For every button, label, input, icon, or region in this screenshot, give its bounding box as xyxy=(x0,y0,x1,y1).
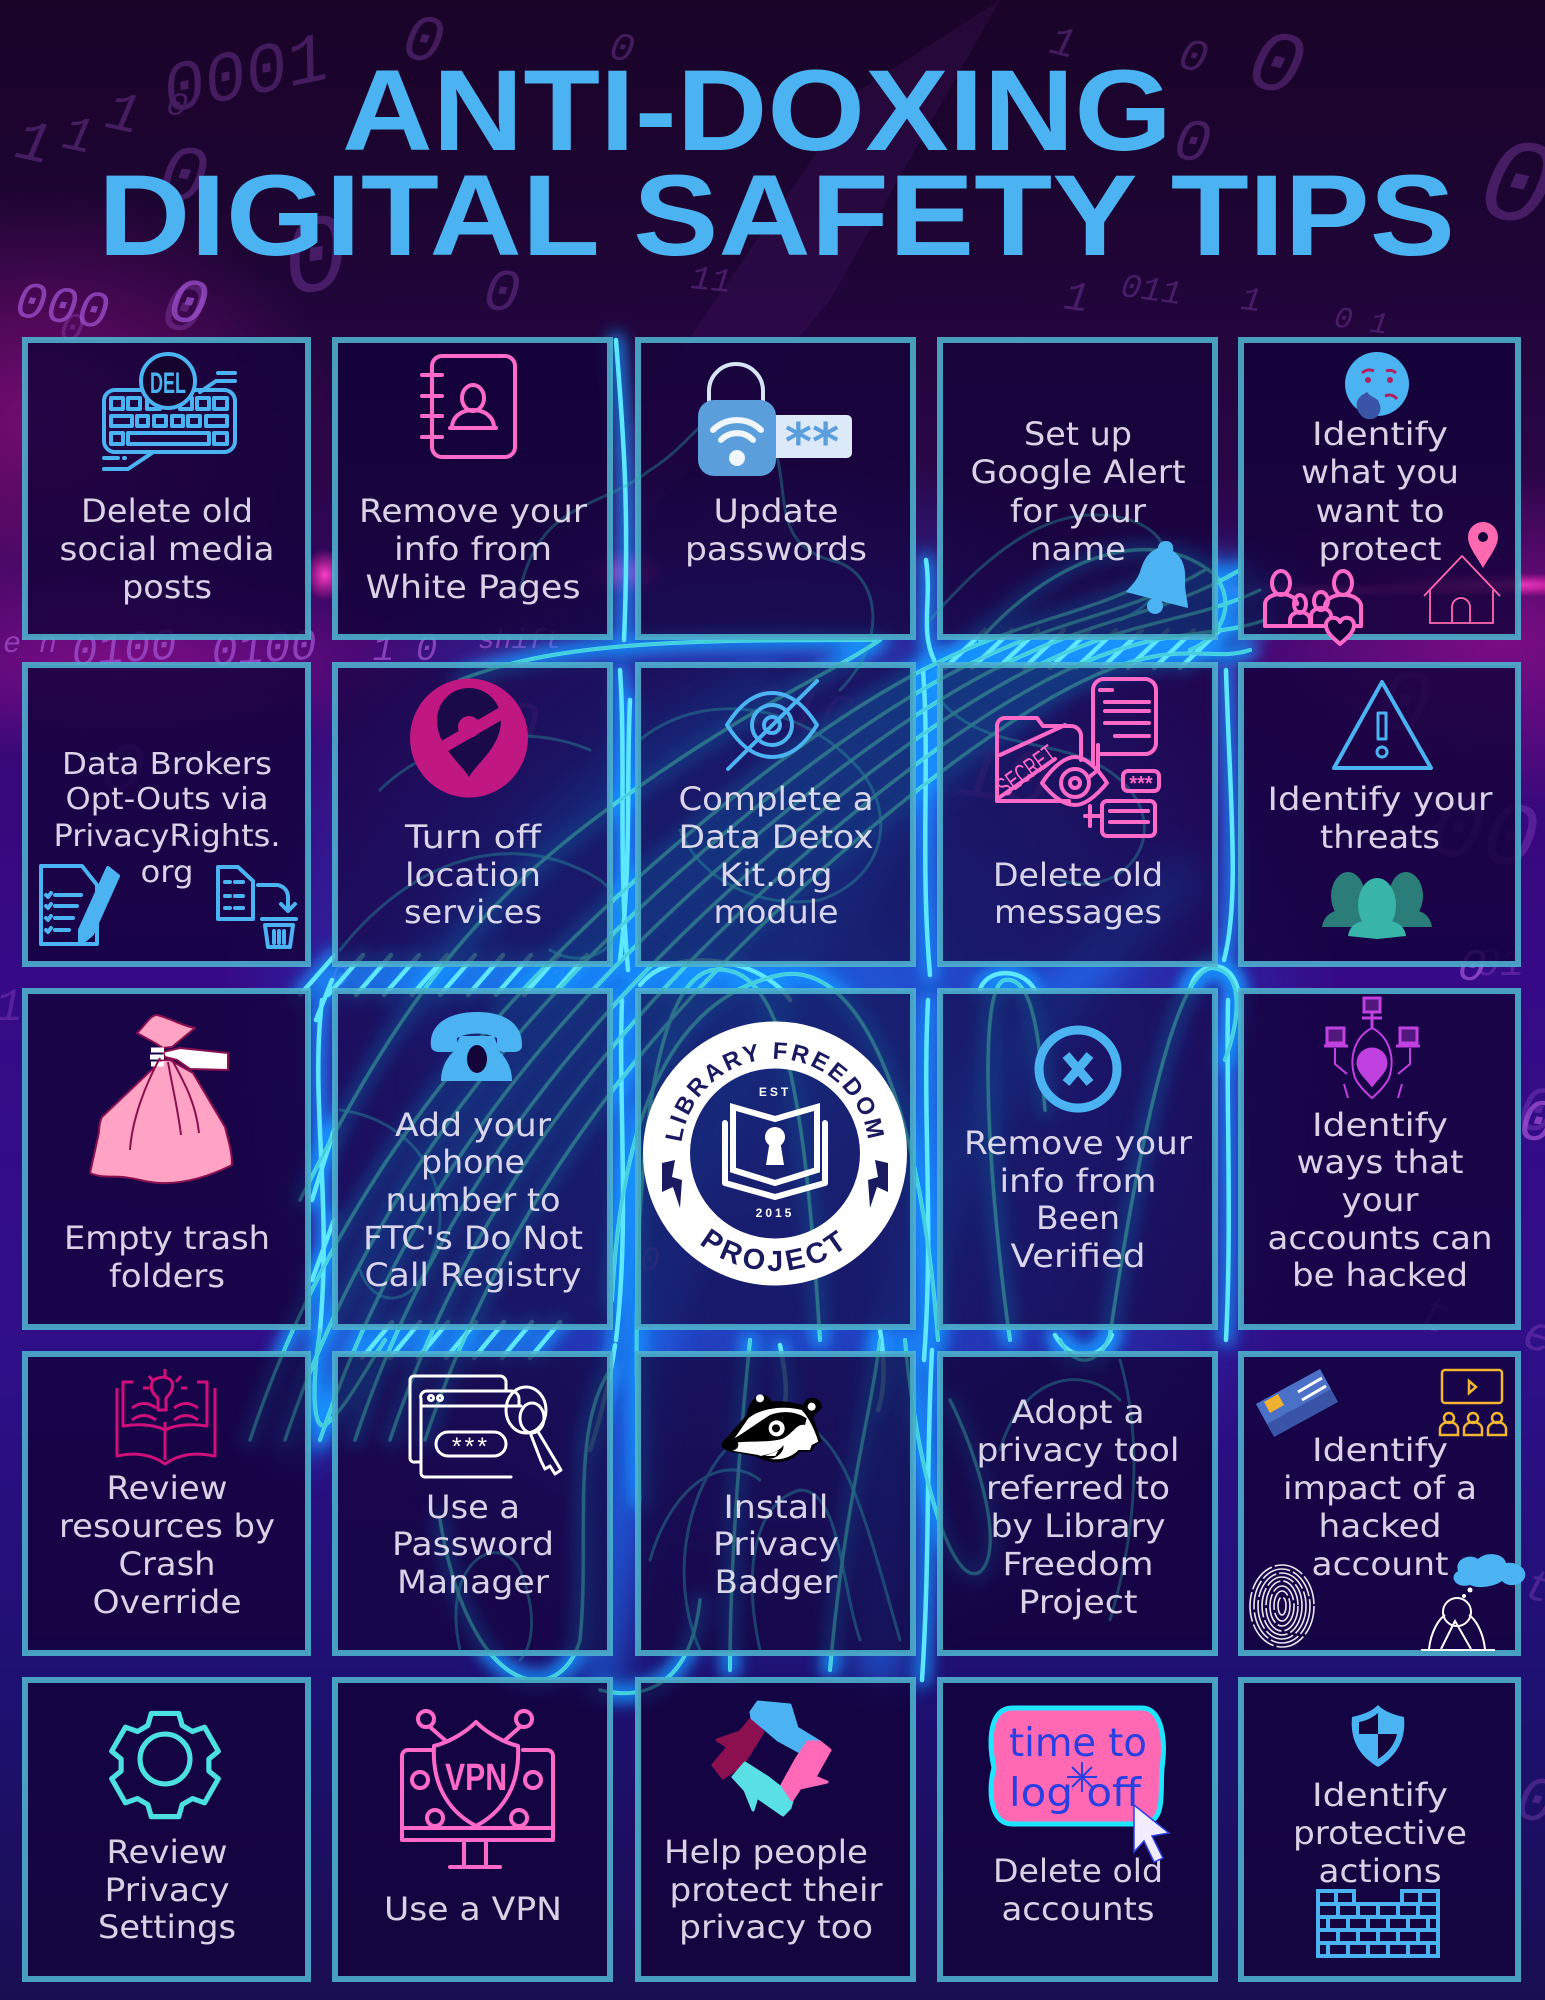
text: add your phone number: FTC's Do Not xyxy=(363,1219,583,1257)
text: delete old social media posts: Delete old xyxy=(81,492,253,530)
background code text in row gap: 1 xyxy=(550,963,570,1001)
icon: keyboard with DEL key: DEL xyxy=(150,367,186,400)
background binary digits: 0001 xyxy=(156,22,337,134)
neon fingerprint swirl lines xyxy=(250,550,1265,1693)
text: review privacy settings: Review xyxy=(106,1833,228,1871)
background binary digits: 011 xyxy=(1118,269,1184,315)
panel: password manager xyxy=(332,1351,613,1656)
logo: library freedom project badge: PROJECT xyxy=(700,1228,842,1272)
text: delete old accounts xyxy=(993,1852,1163,1928)
text: install privacy badger: Badger xyxy=(714,1563,838,1601)
panel: location services xyxy=(332,662,613,967)
text: adopt a privacy tool: Freedom xyxy=(1002,1545,1154,1583)
text: remove info from white pages: White Pages xyxy=(366,568,580,606)
text: remove info from white pages: info from xyxy=(394,530,552,568)
icon: secret folder with eye and messages: *** xyxy=(1129,773,1153,795)
text: delete old accounts: Delete old xyxy=(993,1852,1163,1890)
text: use a password manager xyxy=(392,1488,554,1601)
text: adopt a privacy tool: referred to xyxy=(986,1469,1170,1507)
panel: do not call registry xyxy=(332,988,613,1330)
panel: identify your threats xyxy=(1238,662,1521,967)
text: identify what you want to protect: Identify xyxy=(1312,415,1448,453)
icon: vpn monitor shield xyxy=(402,1711,553,1867)
panel: delete old accounts xyxy=(937,1677,1218,1982)
text: update passwords: passwords xyxy=(685,530,867,568)
text: identify your threats: Identify your xyxy=(1268,780,1493,818)
panel: identify impact of hacked account xyxy=(1238,1351,1525,1656)
text: review resources by crash override: Override xyxy=(92,1583,242,1621)
text: add your phone number: Add your xyxy=(395,1106,552,1144)
background binary digits: 11 xyxy=(689,261,733,303)
title: ANTI-DOXING xyxy=(342,47,1172,175)
text: install privacy badger: Install xyxy=(724,1488,828,1526)
text: delete old social media posts xyxy=(60,492,274,606)
panel: data detox xyxy=(635,662,916,967)
text: update passwords xyxy=(685,492,867,568)
text: delete old social media posts: social media xyxy=(60,530,274,568)
text: set up google alert: name xyxy=(1030,530,1126,568)
text: delete old social media posts: posts xyxy=(122,568,212,606)
icon: fingerprint xyxy=(1250,1565,1314,1647)
background binary digits: 0 xyxy=(275,195,357,328)
panel: help people protect privacy xyxy=(635,1677,916,1982)
icon: thinking face xyxy=(1345,352,1409,419)
icon: badger head xyxy=(722,1394,822,1462)
text: add your phone number: Call Registry xyxy=(364,1256,582,1294)
text: use a password manager: Password xyxy=(392,1525,554,1563)
text: identify ways accounts can be hacked xyxy=(1268,1106,1492,1294)
background binary digits: 0 xyxy=(606,26,637,75)
icon: group of people xyxy=(1322,872,1432,939)
background binary digits: 1 xyxy=(1045,18,1081,71)
text: identify ways accounts can be hacked: accounts can xyxy=(1268,1219,1492,1257)
panel: identify protective actions xyxy=(1238,1677,1521,1982)
text: complete a data detox kit.org module: Kit.org xyxy=(720,856,832,894)
text: remove your info from been verified: info from xyxy=(1000,1162,1156,1200)
text: remove your info from been verified: Been xyxy=(1036,1199,1120,1237)
text: set up google alert: Google Alert xyxy=(970,453,1186,491)
text: update passwords: Update xyxy=(714,492,838,530)
icon: keyboard with DEL key xyxy=(104,354,235,469)
text: identify impact of a hacked account: Identify xyxy=(1312,1431,1448,1469)
text: identify protective actions xyxy=(1293,1776,1467,1890)
text: identify impact of a hacked account: hacked xyxy=(1318,1507,1442,1545)
icon: telephone xyxy=(431,1012,522,1081)
text: adopt a privacy tool xyxy=(976,1393,1180,1621)
text: identify what you want to protect: what you xyxy=(1301,453,1459,491)
text: review resources by crash override: Review xyxy=(106,1469,228,1507)
background binary digits: 0 xyxy=(1173,30,1213,87)
panel: update passwords xyxy=(635,337,916,640)
text: set up google alert xyxy=(970,415,1186,568)
text: data brokers opt-outs: Data Brokers xyxy=(62,747,272,782)
text: use a password manager: Use a xyxy=(426,1488,520,1526)
icon: padlock with password xyxy=(698,364,852,476)
background binary digits: 1 xyxy=(1061,274,1092,325)
text: empty trash folders: Empty trash xyxy=(64,1219,270,1257)
text: help people protect their privacy xyxy=(664,1833,883,1946)
text: use a vpn: Use a VPN xyxy=(384,1890,562,1928)
title xyxy=(98,47,1455,280)
background binary digits: 0 xyxy=(1238,14,1313,123)
panel: adopt a privacy tool xyxy=(937,1351,1218,1656)
neon streak lines xyxy=(300,340,1238,1680)
text: complete a data detox kit.org module: module xyxy=(714,893,838,931)
background binary digits: 0 xyxy=(1170,109,1215,181)
text: identify ways accounts can be hacked: be hacked xyxy=(1292,1256,1468,1294)
icon: login window and keys xyxy=(410,1376,561,1477)
text: data brokers opt-outs: org xyxy=(140,855,194,890)
text: delete old messages xyxy=(993,856,1163,931)
icon: video and audience xyxy=(1440,1370,1506,1435)
text: identify protective actions: protective xyxy=(1293,1814,1467,1852)
text: turn off location services xyxy=(404,818,542,931)
icon: disabled location pin xyxy=(410,678,528,798)
background binary digits: 10 xyxy=(949,728,1057,831)
text: remove info from white pages xyxy=(359,492,588,606)
background binary digits: 0 xyxy=(480,259,523,331)
text: remove your info from been verified xyxy=(964,1124,1193,1275)
icon: padlock with password: ** xyxy=(785,413,839,473)
panel: crash override xyxy=(22,1351,311,1656)
text: identify ways accounts can be hacked: ways that xyxy=(1296,1143,1464,1181)
panel: remove info from been verified xyxy=(937,988,1218,1330)
icon: thinking person and cloud xyxy=(1421,1554,1525,1650)
text: help people protect their privacy: Help people xyxy=(664,1833,868,1871)
background binary digits: 00 xyxy=(1423,779,1544,895)
text: turn off location services: services xyxy=(404,893,542,931)
panel: identify what to protect xyxy=(1238,337,1521,644)
background binary digits: 0 xyxy=(397,2,449,83)
panel frames xyxy=(25,340,1518,1979)
logo: library freedom project badge: LIBRARY FREEDOM xyxy=(665,1042,884,1141)
text: review privacy settings: Settings xyxy=(98,1908,236,1946)
background binary digits: 0 xyxy=(1369,653,1437,761)
background binary digits: 0 xyxy=(96,731,149,815)
background binary digits: 1 xyxy=(9,110,57,181)
icon: x in circle xyxy=(1039,1030,1117,1108)
background binary digits: 1 xyxy=(1238,282,1264,322)
icon: document to trash xyxy=(218,867,296,947)
text: set up google alert: Set up xyxy=(1024,415,1132,453)
text: identify ways accounts can be hacked: your xyxy=(1342,1181,1419,1219)
background binary digits: 10 xyxy=(462,686,542,764)
icon: pink trash bag held by hand xyxy=(90,1015,232,1183)
icon: time to log off badge and cursor: log off xyxy=(1009,1771,1142,1816)
icon: time to log off badge and cursor xyxy=(991,1708,1169,1862)
text: install privacy badger: Privacy xyxy=(713,1525,839,1563)
icon: four interlocked hands xyxy=(713,1702,830,1815)
text: review resources by crash override: Crash xyxy=(118,1545,216,1583)
background binary digits: t xyxy=(1411,1286,1456,1350)
background binary digits: 0 xyxy=(56,306,87,355)
background binary digits: 0 xyxy=(155,270,211,355)
logo: library freedom project badge xyxy=(643,1022,907,1286)
panel: delete old social media posts xyxy=(22,337,311,640)
text: empty trash folders xyxy=(64,1219,270,1295)
logo: library freedom project badge: EST xyxy=(759,1085,791,1099)
background code text in row gap: 0 xyxy=(163,267,213,345)
text: help people protect their privacy: protect their xyxy=(670,1871,883,1909)
text: review resources by crash override xyxy=(59,1469,275,1621)
text: identify impact of a hacked account: impact of a xyxy=(1283,1469,1477,1507)
panel: google alert xyxy=(937,337,1218,640)
background code text in row gap: shift xyxy=(478,626,562,657)
panel: use a vpn xyxy=(332,1677,613,1982)
logo: library freedom project badge: 2015 xyxy=(756,1206,794,1220)
icon: credit card xyxy=(1256,1369,1338,1437)
background code text in row gap: 0100 xyxy=(210,622,319,680)
text: adopt a privacy tool: Project xyxy=(1018,1583,1138,1621)
text: identify your threats xyxy=(1268,780,1493,856)
text: set up google alert: for your xyxy=(1010,492,1147,530)
text: review resources by crash override: resources by xyxy=(59,1507,275,1545)
text: data brokers opt-outs: Opt-Outs via xyxy=(66,782,268,817)
text: add your phone number: number to xyxy=(386,1181,560,1219)
text: add your phone number: phone xyxy=(421,1143,525,1181)
text: add your phone number xyxy=(363,1106,583,1294)
text: turn off location services: Turn off xyxy=(404,818,542,856)
text: review privacy settings xyxy=(98,1833,236,1946)
text: remove your info from been verified: Verified xyxy=(1010,1237,1146,1275)
text: empty trash folders: folders xyxy=(109,1257,225,1295)
text: review privacy settings: Privacy xyxy=(104,1871,230,1909)
text: delete old messages: messages xyxy=(994,893,1162,931)
background binary digits: 0 xyxy=(153,131,213,228)
background binary digits: 010 xyxy=(744,674,860,756)
background code text in row gap: 1 0 xyxy=(373,630,437,671)
background code text in row gap: 0 xyxy=(1454,940,1489,996)
teal swirl lines inside panels xyxy=(250,407,1265,1693)
text: identify what you want to protect xyxy=(1301,415,1459,568)
background code text in row gap: 0 xyxy=(331,961,349,995)
background code text in row gap: 000 xyxy=(11,273,112,344)
text: identify what you want to protect: want to xyxy=(1316,492,1444,530)
panel: identify ways accounts hacked xyxy=(1238,988,1521,1330)
panel: review privacy settings xyxy=(22,1677,311,1982)
icon: gear xyxy=(112,1713,218,1817)
background binary digits: 0 xyxy=(163,86,191,128)
text: turn off location services: location xyxy=(405,856,541,894)
icon: secret folder with eye and messages: SECRET xyxy=(991,739,1062,802)
icon: open book with lightbulb xyxy=(117,1369,215,1464)
icon: bug with computers xyxy=(1324,998,1420,1098)
title: DIGITAL SAFETY TIPS xyxy=(98,152,1455,280)
text: data brokers opt-outs xyxy=(54,747,280,890)
wide blue glow bands xyxy=(300,575,1270,1670)
background code text in row gap: e n xyxy=(3,628,57,662)
text: complete a data detox kit.org module: Complete a xyxy=(678,780,874,818)
text: remove your info from been verified: Remove your xyxy=(964,1124,1193,1162)
neon streaks glow xyxy=(300,340,1238,1680)
background binary digits: 01 xyxy=(1476,943,1524,988)
panel: remove info from white pages xyxy=(332,337,613,640)
text: complete a data detox kit.org module xyxy=(678,780,874,931)
icon: brick firewall xyxy=(1318,1891,1438,1956)
text: identify impact of a hacked account: account xyxy=(1312,1545,1448,1583)
icon: bell xyxy=(1126,541,1188,614)
text: adopt a privacy tool: Adopt a xyxy=(1012,1393,1144,1431)
text: delete old accounts: accounts xyxy=(1002,1890,1154,1928)
text: adopt a privacy tool: privacy tool xyxy=(976,1431,1180,1469)
neon fingerprint swirl glow xyxy=(250,550,1265,1693)
text: identify what you want to protect: protect xyxy=(1318,530,1442,568)
text: install privacy badger xyxy=(713,1488,839,1601)
icon: shield xyxy=(1352,1705,1404,1767)
icon: secret folder with eye and messages xyxy=(991,679,1159,836)
panel: empty trash xyxy=(22,988,311,1330)
text: identify impact of a hacked account xyxy=(1283,1431,1477,1583)
icon: crossed eye xyxy=(727,681,817,769)
panel: data brokers xyxy=(22,662,311,967)
panel: privacy badger xyxy=(635,1351,916,1656)
text: identify protective actions: actions xyxy=(1318,1852,1442,1890)
icon: vpn monitor shield: VPN xyxy=(445,1757,507,1799)
background binary digits: 0 1 xyxy=(1332,302,1390,344)
text: complete a data detox kit.org module: Data Detox xyxy=(678,818,874,856)
text: remove info from white pages: Remove your xyxy=(359,492,588,530)
panel: delete old messages xyxy=(937,662,1218,967)
icon: address book xyxy=(422,356,515,457)
background binary digits: 1 xyxy=(100,81,146,150)
icon: checklist and pen xyxy=(41,866,118,944)
icon: time to log off badge and cursor: time to xyxy=(1009,1721,1147,1766)
background code text in row gap: 0100 xyxy=(70,622,179,680)
background binary digits: 1 xyxy=(57,107,98,169)
panel: library freedom project logo xyxy=(643,1022,907,1286)
text: identify protective actions: Identify xyxy=(1312,1776,1448,1814)
text: identify ways accounts can be hacked: Identify xyxy=(1312,1106,1448,1144)
icon: family and heart xyxy=(1265,571,1361,644)
text: data brokers opt-outs: PrivacyRights. xyxy=(54,819,280,854)
text: adopt a privacy tool: by Library xyxy=(990,1507,1166,1545)
text: help people protect their privacy: privacy too xyxy=(679,1908,873,1946)
text: identify your threats: threats xyxy=(1320,818,1440,856)
icon: login window and keys: *** xyxy=(452,1433,490,1461)
text: use a password manager: Manager xyxy=(397,1563,550,1601)
background code text in row gap xyxy=(3,267,1545,1281)
background code text in row gap: 0 xyxy=(640,1243,660,1281)
icon: location pin and house xyxy=(1424,522,1500,623)
text: delete old messages: Delete old xyxy=(993,856,1163,894)
icon: warning triangle xyxy=(1334,682,1431,768)
